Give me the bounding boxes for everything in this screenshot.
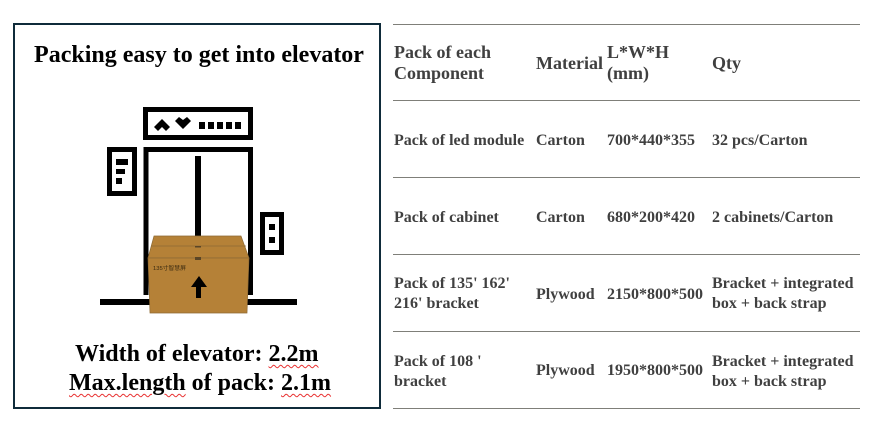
elevator indicator panel [146, 110, 250, 138]
header row: (mm) [607, 63, 649, 83]
caption: max pack length: Max.length of pack: 2.1m [69, 370, 331, 396]
cardboard box [148, 236, 249, 313]
box label: 135寸智慧屏 [153, 264, 186, 272]
row: 135 162 216 bracket: Pack of 135' 162' [394, 275, 510, 292]
row: 135 162 216 bracket: 2150*800*500 [607, 286, 703, 303]
right call panel [262, 214, 282, 252]
row: led module: Carton [536, 132, 585, 149]
heading: packing easy: Packing easy to get into elevator [34, 42, 364, 68]
row: 108 bracket: bracket [394, 373, 446, 390]
row: led module: 32 pcs/Carton [712, 132, 808, 149]
header row: Material [536, 53, 603, 73]
row: led module: 700*440*355 [607, 132, 695, 149]
row: 108 bracket: Bracket + integrated [712, 353, 854, 370]
caption: elevator width: Width of elevator: 2.2m [75, 341, 319, 367]
panel: elevator packing [13, 23, 381, 409]
row: cabinet: Pack of cabinet [394, 209, 499, 226]
row: cabinet: 680*200*420 [607, 209, 695, 226]
row: 135 162 216 bracket [394, 275, 854, 312]
row: 135 162 216 bracket: Bracket + integrated [712, 275, 854, 292]
row: cabinet [394, 209, 834, 226]
row: led module [394, 132, 808, 149]
floor line [100, 299, 297, 305]
elevator door frame [146, 150, 250, 295]
left call panel [110, 150, 134, 194]
header row: Component [394, 63, 484, 83]
row: 135 162 216 bracket: box + back strap [712, 295, 826, 312]
box arrow [191, 276, 207, 298]
row: 108 bracket: 1950*800*500 [607, 362, 703, 379]
row: 108 bracket: Pack of 108 ' [394, 353, 482, 370]
row: led module: Pack of led module [394, 132, 524, 149]
row: 108 bracket: Plywood [536, 362, 595, 379]
header row [394, 42, 741, 83]
header row: Qty [712, 53, 741, 73]
row: 108 bracket: box + back strap [712, 373, 826, 390]
row: 135 162 216 bracket: 216' bracket [394, 295, 479, 312]
header row: L*W*H [607, 42, 669, 62]
row: cabinet: 2 cabinets/Carton [712, 209, 833, 226]
row: 108 bracket [394, 353, 854, 390]
row: 135 162 216 bracket: Plywood [536, 286, 595, 303]
row: cabinet: Carton [536, 209, 585, 226]
header row: Pack of each [394, 42, 491, 62]
